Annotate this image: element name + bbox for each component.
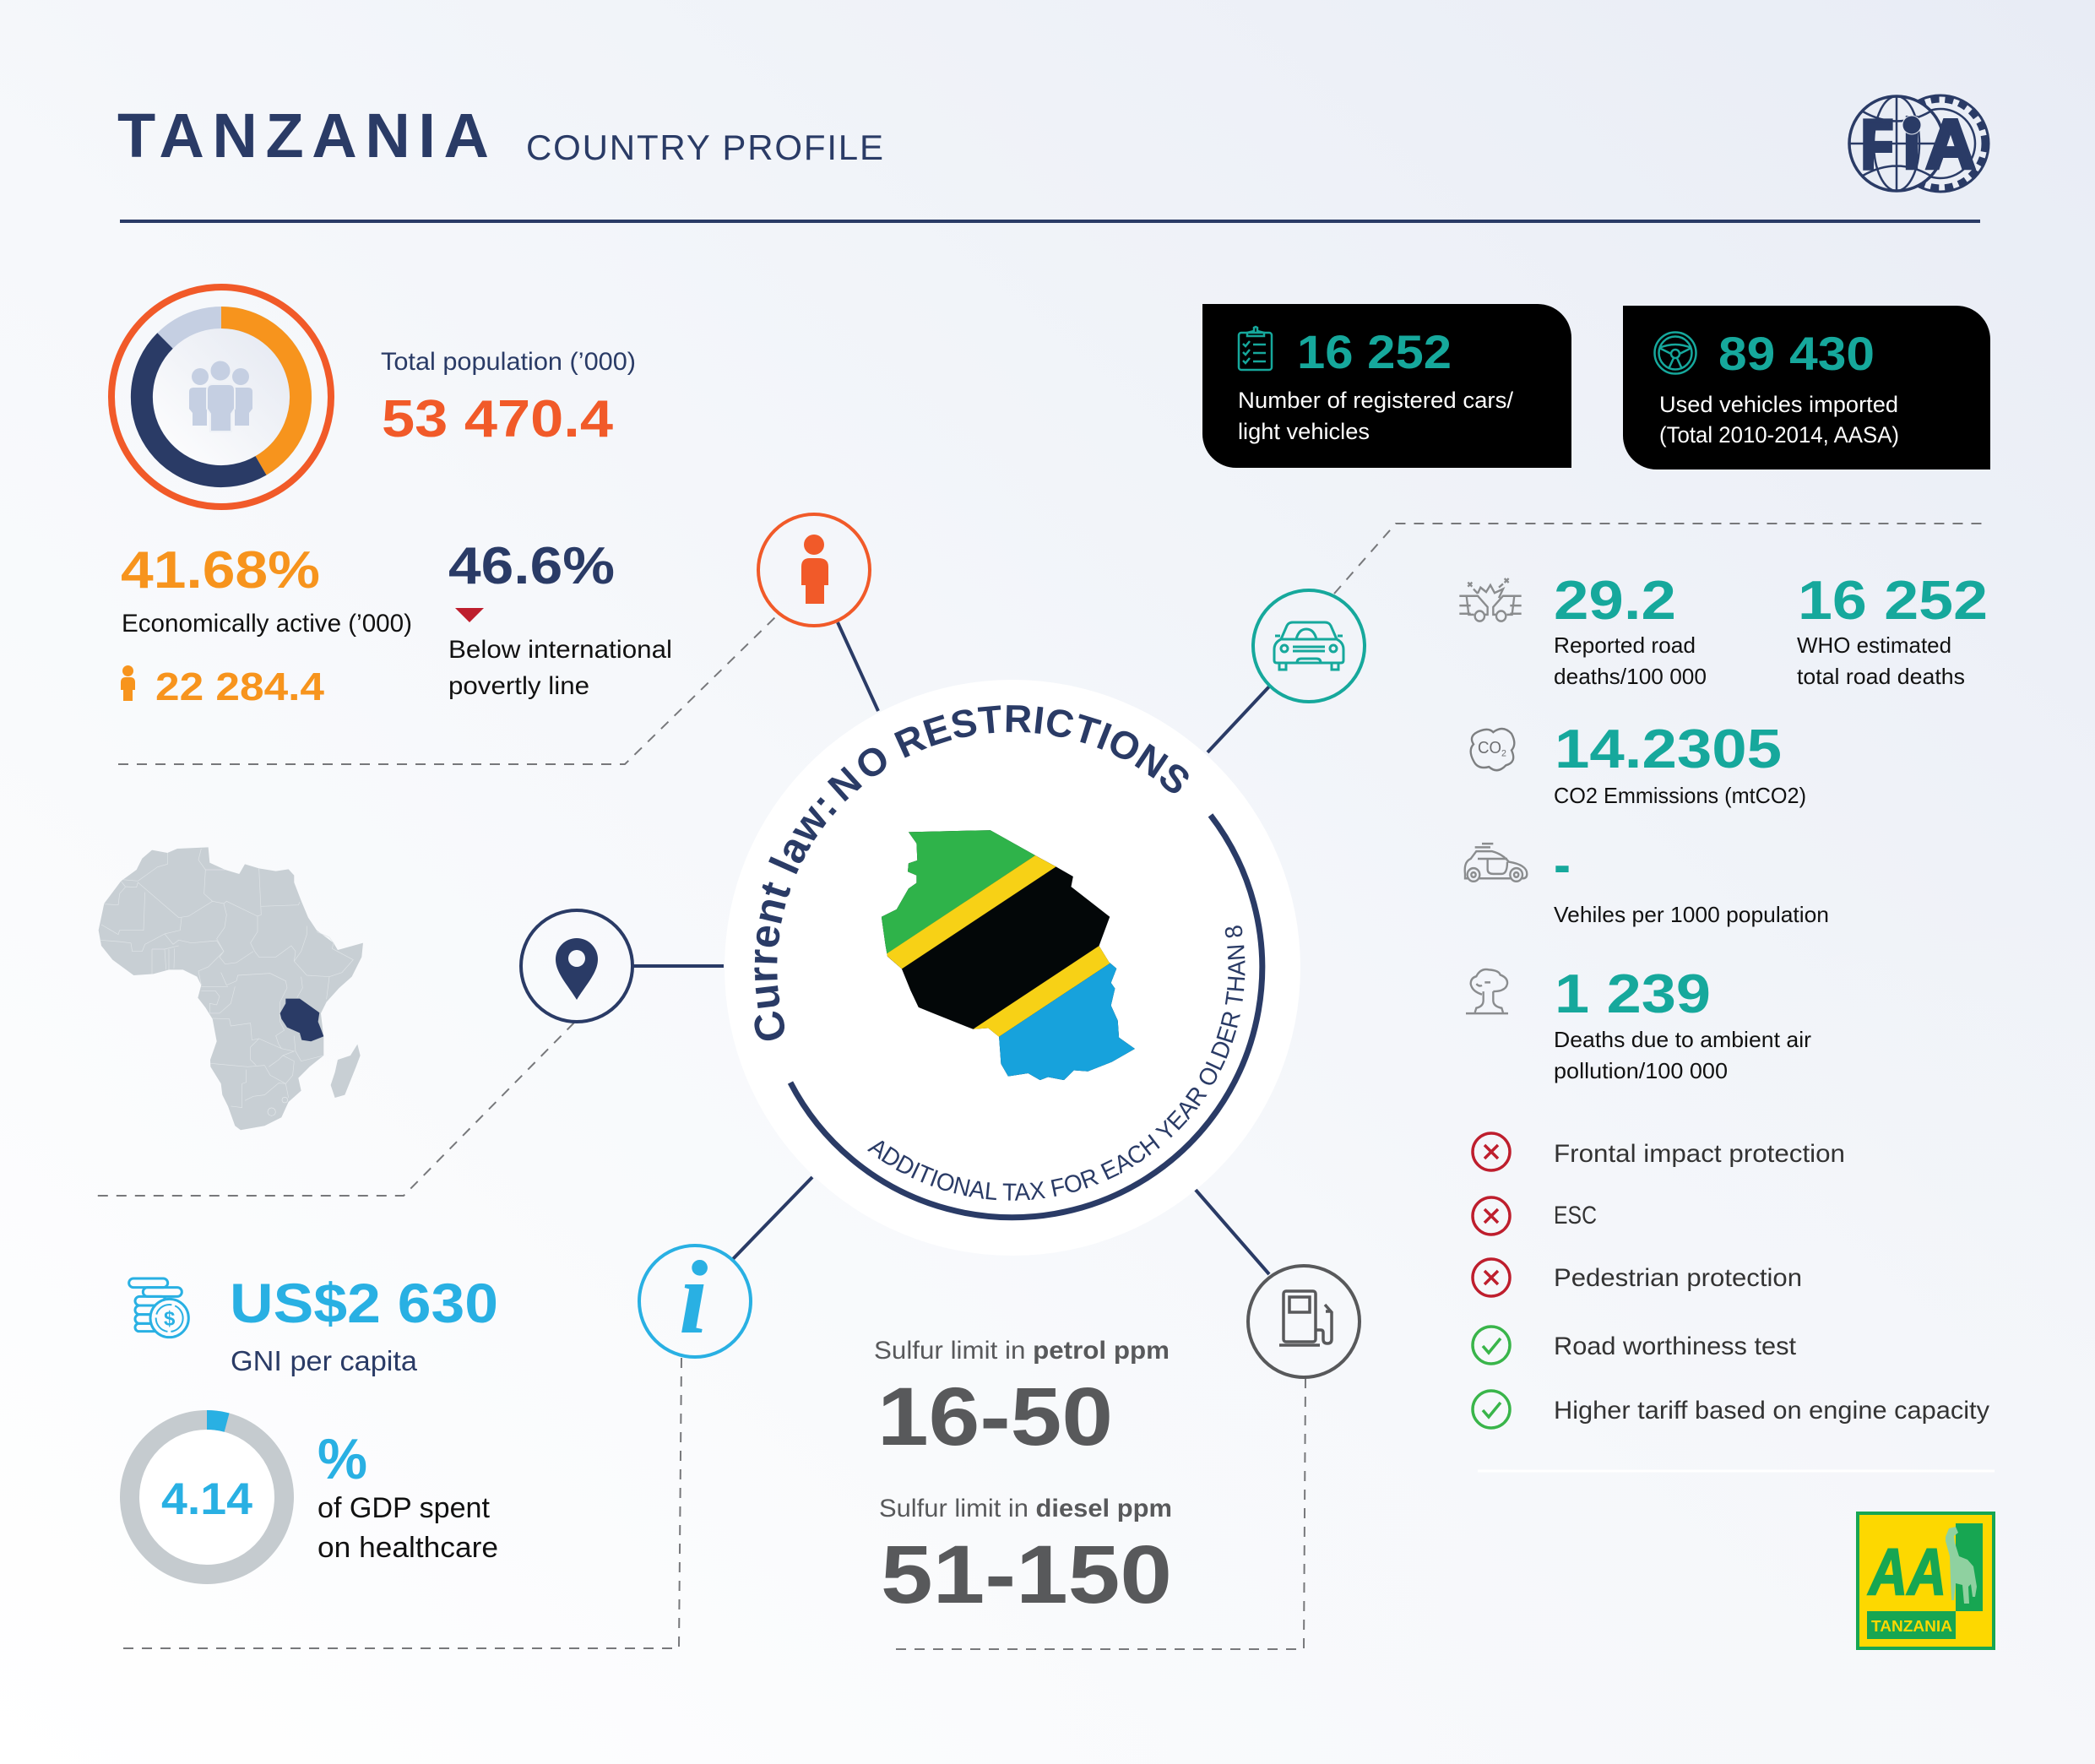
dashed connectors (97, 524, 1989, 1649)
logo: AA Tanzania: AA (1867, 1534, 1946, 1609)
total population: Total population (’000) (381, 348, 636, 376)
icon: car side (1465, 844, 1527, 882)
CO2 emissions (1554, 718, 1806, 808)
panel: vehicle safety checklist (1473, 1133, 1989, 1428)
icon: CO2 cloud: CO (1478, 740, 1501, 757)
arc (790, 815, 1262, 1218)
panel: used vehicles imported: (Total 2010-2014, AASA) (1659, 422, 1899, 448)
road deaths WHO: total road deaths (1797, 664, 1965, 689)
CO2 emissions: 14.2305 (1555, 718, 1782, 779)
petrol: Sulfur limit in petrol ppm (874, 1337, 1170, 1365)
panel: sulfur limits (874, 1337, 1172, 1620)
logo: AA Tanzania (1858, 1513, 1994, 1648)
icon: CO2 cloud: 2 (1501, 748, 1506, 759)
panel: central circle (725, 680, 1300, 1250)
header (117, 100, 1980, 221)
icon: info circle (639, 1240, 751, 1357)
icon: coins (129, 1278, 188, 1338)
air pollution deaths: 1 239 (1555, 963, 1711, 1024)
panel: used vehicles imported: 89 430 (1718, 327, 1875, 380)
icon: steering wheel (1655, 333, 1696, 373)
health text (318, 1427, 498, 1564)
road deaths WHO: 16 252 (1798, 569, 1988, 631)
road deaths WHO: WHO estimated (1797, 632, 1951, 658)
map: Africa (99, 847, 363, 1130)
item: ESC: ESC (1554, 1202, 1597, 1229)
total population: 53 470.4 (382, 390, 614, 448)
panel: population (111, 287, 672, 708)
icon: CO2 cloud (1471, 729, 1514, 770)
economically active (121, 541, 412, 708)
item: frontal impact (1473, 1133, 1845, 1170)
health donut chart: 4.14 (161, 1474, 253, 1524)
connector lines (632, 622, 1270, 1274)
item: road worthiness: Road worthiness test (1554, 1332, 1797, 1360)
health text: of GDP spent (318, 1492, 491, 1524)
giraffe (1946, 1527, 1977, 1604)
economically active: Economically active (’000) (122, 610, 412, 638)
panel: registered vehicles: Number of registered cars/ (1238, 388, 1514, 413)
road deaths reported: 29.2 (1554, 569, 1676, 631)
item: ESC (1473, 1197, 1597, 1235)
curved heading (754, 705, 1189, 1040)
air pollution deaths (1554, 963, 1811, 1083)
item: tariff (1473, 1391, 1989, 1428)
health donut chart (130, 1420, 284, 1574)
poverty (448, 537, 672, 700)
item: frontal impact: Frontal impact protection (1554, 1140, 1845, 1168)
diesel (879, 1495, 1172, 1620)
petrol (874, 1337, 1170, 1463)
item: pedestrian (1473, 1259, 1802, 1296)
poverty: 46.6% (448, 537, 615, 595)
icon: location circle (521, 910, 632, 1022)
item: tariff: Higher tariff based on engine capacity (1554, 1397, 1989, 1425)
economically active: 41.68% (121, 541, 320, 600)
panel: used vehicles imported (1623, 306, 1990, 469)
air pollution deaths: Deaths due to ambient air (1554, 1027, 1811, 1052)
icon: clipboard (1239, 327, 1272, 370)
diesel: Sulfur limit in diesel ppm (879, 1495, 1172, 1522)
subtitle: COUNTRY PROFILE (526, 128, 883, 167)
panel: registered vehicles: 16 252 (1297, 325, 1452, 378)
logo: FIA (1849, 95, 1989, 192)
poverty: Below international (448, 636, 672, 664)
logo: FIA: A (1926, 106, 1975, 183)
vehicles per 1000: Vehiles per 1000 population (1554, 902, 1829, 927)
icon: air pollution (1466, 969, 1508, 1013)
economically active: 22 284.4 (155, 665, 324, 708)
panel: registered vehicles (1202, 304, 1571, 468)
icon: info circle: i (679, 1240, 708, 1355)
diesel: 51-150 (881, 1528, 1172, 1620)
health text: on healthcare (318, 1532, 498, 1564)
icon: car circle (1253, 590, 1365, 702)
logo: FIA: F (1861, 106, 1893, 183)
icon: coins: $ (164, 1307, 175, 1330)
icon: people (189, 361, 252, 432)
poverty: povertly line (448, 672, 589, 700)
icon: crash (1459, 578, 1522, 621)
road deaths reported: Reported road (1554, 632, 1696, 658)
vehicles per 1000 (1554, 833, 1829, 927)
item: pedestrian: Pedestrian protection (1554, 1264, 1802, 1292)
icon: fuel circle (1248, 1266, 1360, 1377)
logo: FIA: i (1903, 106, 1920, 183)
road deaths WHO (1797, 569, 1988, 689)
air pollution deaths: pollution/100 000 (1554, 1058, 1728, 1083)
curved heading: NO (828, 748, 887, 802)
road deaths reported: deaths/100 000 (1554, 664, 1707, 689)
logo: AA Tanzania: TANZANIA (1871, 1618, 1952, 1635)
vehicles per 1000: - (1554, 833, 1571, 895)
petrol: 16-50 (877, 1370, 1113, 1463)
road deaths reported (1554, 569, 1707, 689)
item: road worthiness (1473, 1327, 1797, 1364)
population donut chart (111, 287, 331, 507)
health text: % (318, 1427, 367, 1491)
panel: road and air statistics (1459, 569, 1988, 1083)
icon: person circle (758, 514, 870, 626)
Tanzania highlight (280, 999, 323, 1041)
GNI: US$2 630 (230, 1272, 498, 1334)
icon: person small (121, 665, 135, 701)
map: Tanzania flag (882, 830, 1135, 1081)
panel: economy (129, 1272, 498, 1574)
GNI (230, 1272, 498, 1376)
curved heading: Current law: (754, 797, 837, 1040)
curved heading: RESTRICTIONS (893, 705, 1189, 794)
CO2 emissions: CO2 Emmissions (mtCO2) (1554, 783, 1806, 808)
curved note: ADDITIONAL TAX FOR EACH YEAR OLDER THAN 8 (867, 925, 1245, 1201)
panel: registered vehicles: light vehicles (1238, 419, 1370, 444)
GNI: GNI per capita (231, 1345, 418, 1376)
total population (381, 348, 636, 448)
title: TANZANIA (117, 100, 489, 171)
panel: used vehicles imported: Used vehicles imported (1659, 392, 1898, 417)
